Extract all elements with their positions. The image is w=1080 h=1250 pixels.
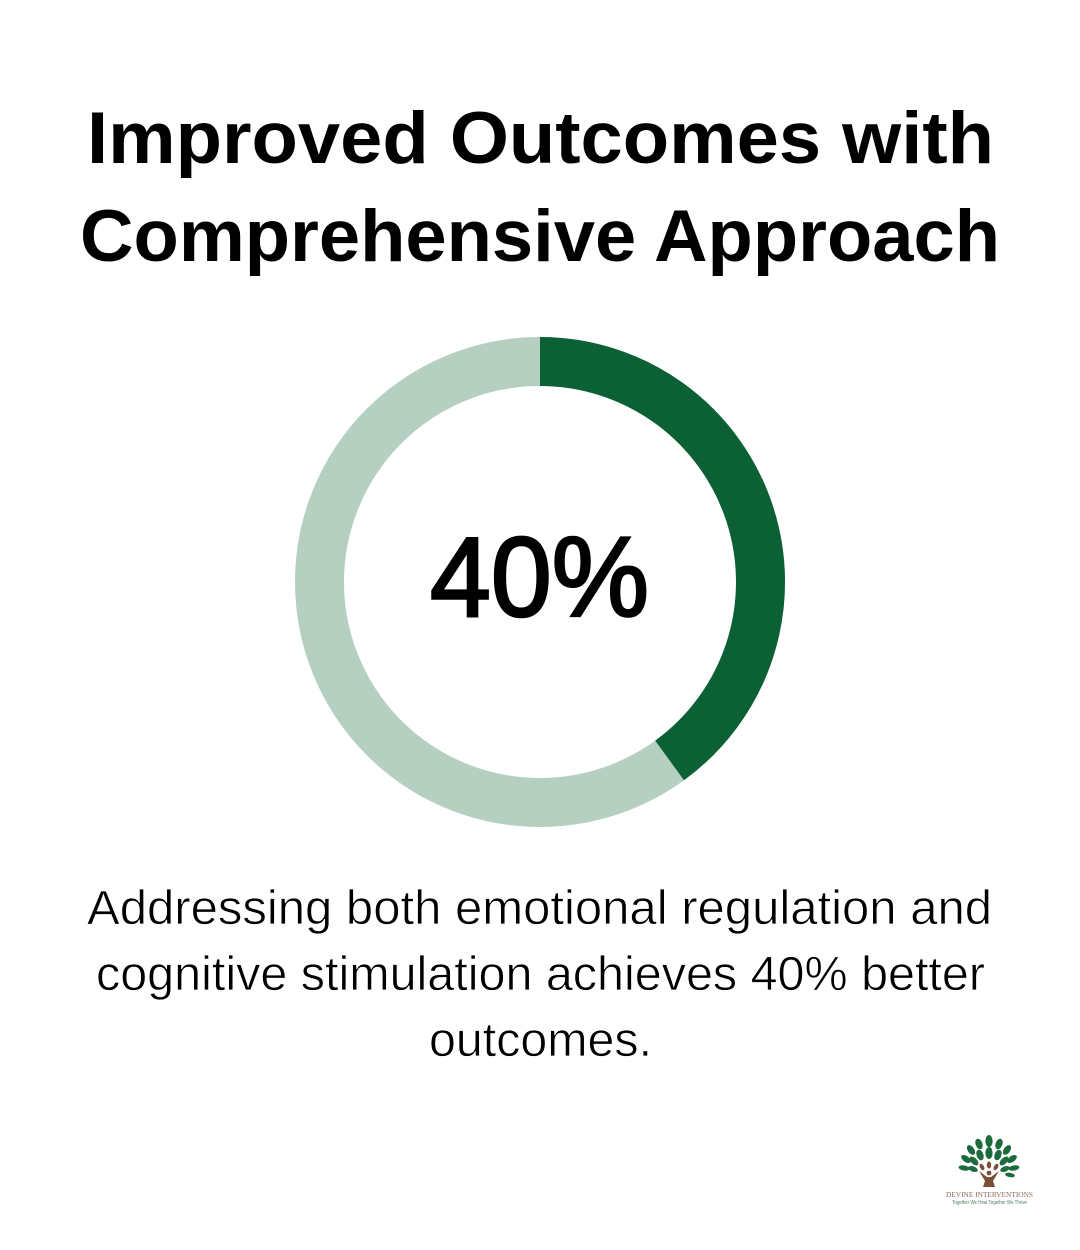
- description text: Addressing both emotional regulation and: [87, 882, 992, 935]
- logo name: DEVINE INTERVENTIONS: [946, 1191, 1033, 1199]
- title: Comprehensive Approach: [80, 196, 1000, 277]
- icon: tree figure: [979, 1162, 999, 1187]
- description text: outcomes.: [429, 1014, 652, 1067]
- description text: cognitive stimulation achieves 40% better: [96, 948, 985, 1001]
- description text: [87, 882, 992, 1067]
- donut chart: 40%: [320, 362, 761, 802]
- icon: tree leaves: [958, 1135, 1020, 1178]
- title: Improved Outcomes with: [87, 98, 994, 179]
- logo tagline: Together We Heal Together We Thrive: [952, 1200, 1027, 1206]
- donut value: 40%: [430, 514, 649, 640]
- logo: Devine Interventions: [946, 1135, 1033, 1206]
- title: [80, 98, 1000, 277]
